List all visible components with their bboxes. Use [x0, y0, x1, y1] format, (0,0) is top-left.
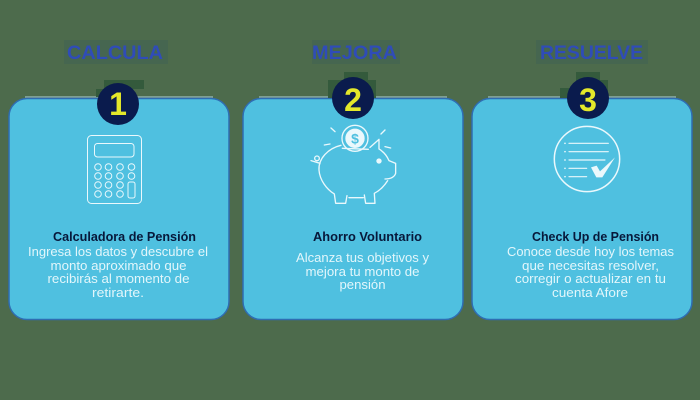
- step badge 2: [328, 72, 376, 119]
- description: check up: Conoce desde hoy los temas: [507, 245, 674, 259]
- description: ahorro: pensión: [340, 278, 386, 292]
- description: check up: [507, 245, 674, 300]
- icon: piggy bank: [311, 125, 396, 203]
- card title: check up de pensión: Check Up de Pensión: [532, 230, 659, 244]
- icon: checklist: [554, 126, 620, 192]
- step badge 1: [96, 80, 144, 125]
- description: ahorro: mejora tu monto de: [306, 265, 420, 279]
- heading: calcula: CALCULA: [67, 43, 163, 64]
- description: calculadora: retirarte.: [92, 286, 144, 300]
- icon: piggy bank: $: [351, 130, 359, 146]
- card: resuelve: [472, 96, 692, 320]
- description: calculadora: [28, 245, 208, 300]
- heading: mejora: MEJORA: [312, 43, 397, 64]
- description: check up: corregir o actualizar en tu: [515, 272, 666, 286]
- card title: ahorro voluntario: Ahorro Voluntario: [313, 230, 422, 244]
- step badge 2: 2: [344, 82, 362, 118]
- description: calculadora: Ingresa los datos y descubre el: [28, 245, 208, 259]
- description: ahorro: [296, 251, 430, 292]
- description: calculadora: monto aproximado que: [50, 259, 187, 273]
- card: mejora: [243, 96, 463, 320]
- card: calcula: [9, 96, 229, 320]
- description: calculadora: recibirás al momento de: [48, 272, 190, 286]
- panel: calcula: [9, 40, 229, 320]
- panel: resuelve: [472, 40, 692, 320]
- description: check up: que necesitas resolver,: [522, 259, 659, 273]
- description: ahorro: Alcanza tus objetivos y: [296, 251, 430, 265]
- description: check up: cuenta Afore: [552, 286, 628, 300]
- card title: calculadora de pensión: Calculadora de Pensión: [53, 230, 196, 244]
- heading: resuelve: RESUELVE: [540, 43, 643, 64]
- step badge 3: [560, 72, 609, 119]
- step badge 3: 3: [579, 82, 597, 118]
- panel: mejora: [243, 40, 463, 320]
- icon: calculator: [88, 136, 142, 204]
- step badge 1: 1: [109, 86, 127, 122]
